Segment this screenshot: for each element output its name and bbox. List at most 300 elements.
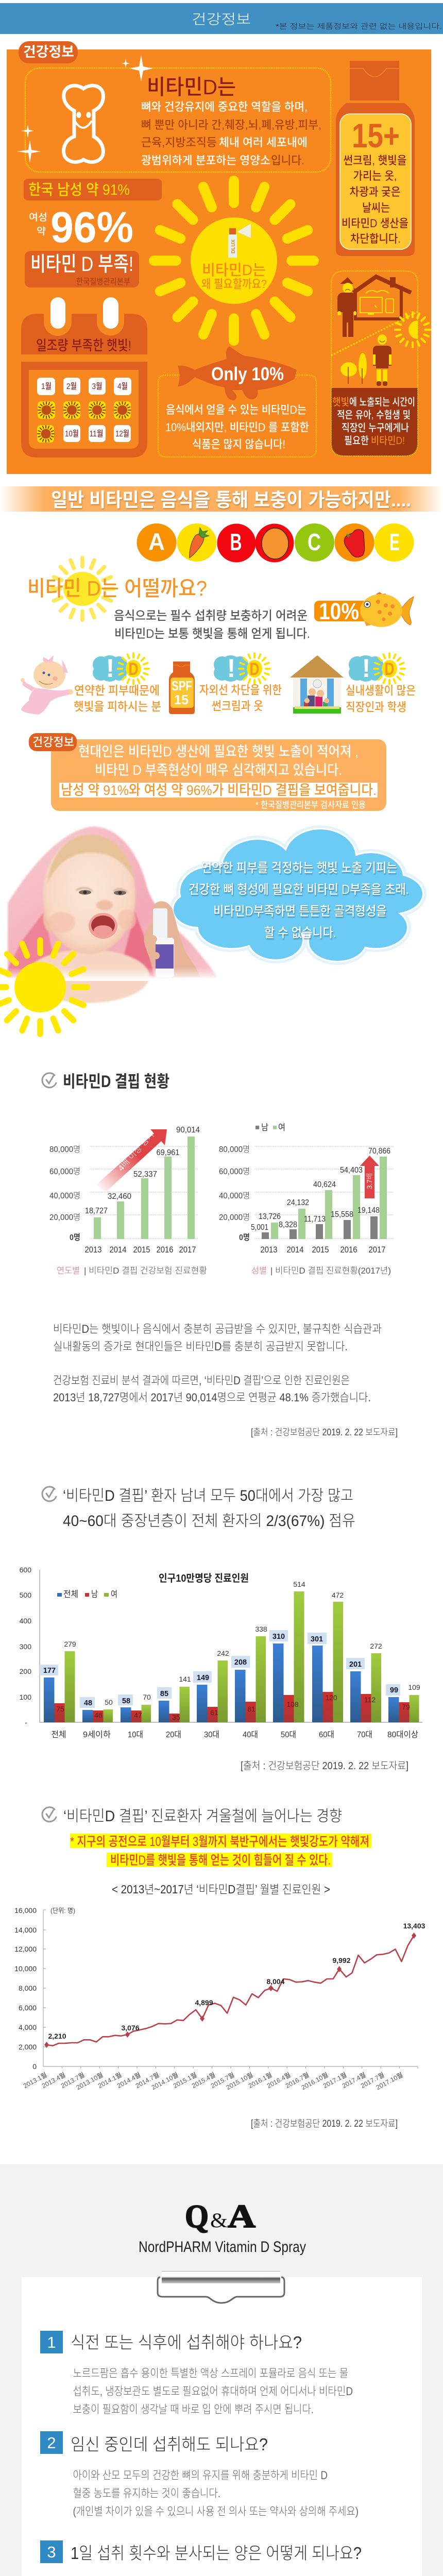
- month cells: 11월: [90, 429, 103, 438]
- question 3: 3: [47, 2543, 56, 2561]
- line chart: monthly patients: [14, 1906, 425, 2091]
- stat: Korean men 91%: 한국 남성 약 91%: [28, 181, 130, 198]
- callout text: 비타민 D 부족현상이 매우 심각해지고 있습니다.: [95, 762, 342, 778]
- big sun: 왜 필요할까요?: [201, 277, 267, 291]
- warning group: sensitive skin baby: [21, 653, 161, 715]
- stat: women 96%: 약: [37, 226, 46, 237]
- callout: vitamin D deficiency: [25, 251, 139, 287]
- icon: warning cloud and sun: [93, 653, 149, 684]
- callout: vitamin D deficiency: 한국질병관리본부: [76, 277, 130, 286]
- bottle text: 날씨는: [362, 201, 390, 214]
- icon: small sun: [395, 312, 430, 347]
- caption: 연약한 피부때문에: [74, 684, 160, 697]
- warning marks: !: [106, 654, 114, 683]
- scene text: 적은 유아, 수험생 및: [337, 409, 411, 421]
- only 10% label: Only 10%: [211, 363, 284, 384]
- source note: * 한국질병관리본부 검사자료 인용: [255, 800, 366, 810]
- total labels: 58: [122, 1697, 130, 1705]
- y axis labels: 40,000명: [219, 1191, 250, 1200]
- question 1: 1: [47, 2333, 56, 2351]
- icon: check: [42, 1807, 56, 1822]
- month labels: 2016.4월: [265, 2071, 292, 2090]
- heading: vitamin D is: 비타민D는: [147, 75, 236, 99]
- value labels: 11,713: [304, 1215, 326, 1224]
- heading: age group: 40~60대 중장년층이 전체 환자의 2/3(67%) 점유: [63, 1513, 355, 1530]
- month labels: 2014.1월: [96, 2071, 123, 2090]
- category labels: [52, 1730, 418, 1739]
- value labels: [251, 1147, 390, 1232]
- month labels: 2014.4월: [115, 2071, 142, 2090]
- category labels: 10대: [128, 1730, 143, 1739]
- year labels: 2014: [109, 1245, 127, 1255]
- vitamin letters: B: [230, 529, 242, 555]
- answer 2: (개인별 차이가 있을 수 있으니 사용 전 의사 또는 약사와 상의해 주세요): [73, 2505, 359, 2518]
- value labels: 15,558: [331, 1210, 353, 1219]
- vitamin letters: E: [389, 529, 400, 555]
- panel: lack of sunlight scene: [331, 271, 430, 456]
- source note: [출처 : 건강보험공단 2019. 2. 22 보도자료]: [241, 1760, 408, 1772]
- calendar heading: 일조량 부족한 햇빛!: [36, 338, 131, 353]
- month labels: 2016.1월: [247, 2071, 273, 2090]
- unit label: (단위: 명): [50, 1907, 75, 1914]
- spray in hand: [144, 901, 201, 977]
- cloud text: [189, 861, 409, 940]
- cloud text: 할 수 없습니다.: [264, 926, 336, 940]
- pill: 10%: 10%: [319, 598, 359, 624]
- male labels: 61: [210, 1708, 218, 1717]
- body text: 비타민D는 보통 햇빛을 통해 얻게 됩니다.: [114, 627, 310, 641]
- total labels: 310: [272, 1633, 285, 1641]
- total labels: 208: [234, 1658, 247, 1667]
- stat: women 96%: 96%: [50, 203, 133, 251]
- body text: 음식으로는 필수 섭취량 보충하기 어려운: [114, 609, 308, 623]
- year labels: 2013: [84, 1245, 102, 1255]
- category labels: 50대: [281, 1730, 296, 1739]
- question 1: 식전 또는 식후에 섭취해야 하나요?: [71, 2333, 302, 2352]
- warning marks: [362, 654, 395, 683]
- year labels: 2015: [312, 1245, 329, 1255]
- female labels: 141: [179, 1675, 191, 1683]
- y labels: 400: [20, 1617, 31, 1625]
- total labels: 177: [43, 1667, 56, 1675]
- female labels: 338: [255, 1625, 267, 1633]
- y axis labels: 60,000명: [49, 1167, 80, 1176]
- month labels: 2013.1월: [22, 2071, 48, 2090]
- answer 1: 보충이 필요함이 생각날 때 바로 입 안에 뿌려 주시면 됩니다.: [73, 2403, 314, 2416]
- warning marks: !: [227, 654, 235, 683]
- total labels: 301: [311, 1635, 323, 1643]
- Q&A title: &: [210, 2209, 228, 2232]
- category labels: 40대: [243, 1730, 258, 1739]
- male labels: [56, 1693, 410, 1721]
- value labels: 54,403: [340, 1166, 363, 1175]
- data labels: 2,210: [48, 2032, 66, 2040]
- scene text: [332, 396, 415, 447]
- bottle text: 비타민D 생산을: [342, 217, 408, 230]
- chart caption: 성별: [251, 1266, 267, 1276]
- description text: 뼈와 건강유지에 중요한 역할을 하며,: [141, 100, 308, 113]
- body text: deficiency explanation: 비타민D는 햇빛이나 음식에서 충분히 공급받을 수 있지만, 불규칙한 식습관과: [53, 1323, 382, 1335]
- total labels: 201: [349, 1660, 362, 1669]
- icon: SPF bottle: [169, 662, 195, 714]
- month labels: 2017.1월: [321, 2071, 348, 2090]
- scene text: 에 노출되는 시간이: [349, 396, 415, 408]
- male labels: 108: [286, 1700, 299, 1708]
- y labels: 10,000: [14, 1964, 37, 1973]
- y axis labels: 20,000명: [219, 1213, 250, 1222]
- answer 2: 혈중 농도를 유지하는 것이 좋습니다.: [73, 2487, 220, 2500]
- month labels: 2015.1월: [172, 2071, 198, 2090]
- caption: [346, 684, 416, 714]
- scene text: 햇빛: [332, 396, 349, 408]
- section: how about vitamin D: [27, 558, 414, 641]
- chart title: 인구10만명당 진료인원: [159, 1572, 249, 1584]
- month labels: 2016.10월: [300, 2071, 329, 2091]
- chart caption: 연도별: [57, 1266, 80, 1276]
- total labels: 85: [160, 1690, 168, 1698]
- body text: deficiency explanation: 2013년 18,727명에서 2017년 90,014명으로 연평균 48.1% 증가했습니다.: [53, 1391, 371, 1404]
- male labels: 81: [247, 1705, 255, 1713]
- year labels: 2014: [286, 1245, 304, 1255]
- stat: women 96%: 여성: [29, 212, 47, 223]
- red bars: [55, 1692, 409, 1722]
- month labels: 2015.4월: [190, 2071, 216, 2090]
- data labels: 8,004: [266, 1977, 285, 1986]
- arrow: 3.7x: 3.7배: [365, 1173, 373, 1189]
- arrow: 4x increase: [96, 1129, 167, 1192]
- year labels: [84, 1245, 196, 1255]
- heading: 비타민 D는 어떨까요?: [27, 577, 207, 600]
- month labels: 2015.7월: [209, 2071, 235, 2090]
- month cells: 10월: [65, 429, 79, 438]
- big sun: [154, 181, 314, 341]
- y labels: 6,000: [19, 2004, 37, 2012]
- y labels: 2,000: [19, 2043, 37, 2051]
- calendar: [21, 297, 147, 457]
- heading: age group: ‘비타민D 결핍’ 환자 남녀 모두 50대에서 가장 많고: [63, 1487, 353, 1504]
- caption: 자외선 차단을 위한: [199, 683, 282, 697]
- year labels: 2013: [261, 1245, 277, 1255]
- y axis labels: 0명: [70, 1233, 80, 1242]
- scene text: 직장인 누구에게나: [342, 422, 409, 434]
- data labels: [48, 1922, 425, 2040]
- icon: sad person indoors: [337, 277, 356, 337]
- Q&A section: [0, 2164, 443, 2576]
- blue bars: [44, 1643, 399, 1722]
- female labels: [64, 1580, 420, 1706]
- y labels: [20, 1566, 31, 1726]
- description text: 광범위하게 분포하는 영양소: [141, 154, 270, 167]
- bottle text: 가리는 옷,: [353, 170, 397, 182]
- panel: orange vitamin D overview: [7, 41, 431, 474]
- male labels: 47: [134, 1711, 142, 1719]
- total labels: 149: [197, 1674, 209, 1682]
- y labels: 100: [20, 1693, 31, 1701]
- female labels: 109: [408, 1683, 420, 1691]
- value labels: 19,148: [357, 1206, 380, 1215]
- icon: orange fruit: [262, 528, 288, 559]
- male labels: 35: [172, 1713, 180, 1721]
- y labels: 200: [20, 1667, 31, 1675]
- callout text: 현대인은 비타민D 생산에 필요한 햇빛 노출이 적어져 ,: [78, 744, 359, 759]
- icon: spray: DLUX: [231, 239, 236, 253]
- body text: deficiency explanation: [53, 1323, 382, 1404]
- icon: check: [42, 1073, 56, 1088]
- bottle text: [342, 154, 408, 245]
- answer 2: [73, 2469, 359, 2518]
- icon: clipboard clip: [158, 2271, 284, 2303]
- question 3: 1일 섭취 횟수와 분사되는 양은 어떻게 되나요?: [71, 2544, 362, 2563]
- heading: winter trend: ‘비타민D 결핍’ 진료환자 겨울철에 늘어나는 경향: [63, 1808, 342, 1825]
- year labels: [261, 1245, 385, 1255]
- month cells: 3월: [92, 382, 102, 391]
- y labels: 8,000: [19, 1984, 37, 1992]
- Q&A title: A: [228, 2198, 255, 2234]
- value labels: 32,460: [108, 1192, 131, 1201]
- month labels: [22, 2071, 404, 2091]
- category labels: 70대: [357, 1730, 372, 1739]
- legend: [255, 1123, 285, 1132]
- answer 1: [73, 2367, 353, 2416]
- warning marks: !: [362, 654, 370, 683]
- header title: 건강정보: [192, 12, 251, 27]
- caption: 썬크림과 옷: [212, 699, 263, 713]
- chart title: < 2013년~2017년 ‘비타민D결핍’ 월별 진료인원 >: [112, 1883, 330, 1896]
- y axis labels: 20,000명: [49, 1213, 80, 1222]
- warning marks: D: [384, 659, 395, 679]
- scene text: 필요한: [344, 435, 369, 447]
- source note: [출처 : 건강보험공단 2019. 2. 22 보도자료]: [251, 1427, 398, 1437]
- y axis labels: 80,000명: [219, 1145, 250, 1154]
- callout text: [78, 744, 359, 778]
- month cells: [37, 378, 131, 443]
- header note: *본 정보는 제품정보와 관련 없는 내용입니다.: [276, 22, 442, 30]
- icon: baby: [21, 655, 73, 715]
- warning marks: D: [249, 659, 260, 679]
- scene text: 비타민D!: [371, 435, 405, 447]
- bar chart: patients per 100k by age: [20, 1566, 422, 1739]
- highlighted statistic: 남성 약 91%와 여성 약 96%가 비타민D 결핍을 보여줍니다.: [61, 783, 377, 798]
- callout: vitamin D deficiency: 비타민 D 부족!: [30, 253, 133, 276]
- markers: [44, 1933, 416, 2048]
- month cells: 2월: [66, 382, 77, 391]
- male labels: 75: [56, 1705, 64, 1713]
- bottle text: 차단합니다.: [350, 232, 401, 245]
- month cells: 12월: [115, 429, 129, 438]
- female labels: 272: [370, 1642, 382, 1650]
- data line: [47, 1936, 414, 2046]
- dotted box: what is vitamin D: [17, 55, 331, 172]
- category labels: 60대: [319, 1730, 334, 1739]
- highlighted note: 비타민D를 햇빛을 통해 얻는 것이 힘들어 질 수 있다.: [110, 1853, 331, 1868]
- category labels: 20대: [166, 1730, 181, 1739]
- vitamin letters: C: [308, 529, 321, 555]
- month cells: 4월: [117, 382, 128, 391]
- icon: check: [42, 1487, 56, 1501]
- male labels: 120: [325, 1693, 337, 1702]
- y labels: [14, 1906, 37, 2071]
- icon: trees: [340, 353, 367, 384]
- callout: modern deficiency: [29, 733, 386, 811]
- female labels: 514: [293, 1580, 305, 1588]
- green bars: [65, 1591, 419, 1722]
- year labels: 2015: [133, 1245, 150, 1255]
- month labels: 2017.10월: [374, 2071, 404, 2091]
- month labels: 2017.4월: [340, 2071, 367, 2090]
- body text: deficiency explanation: 건강보험 진료비 분석 결과에 따르면, ‘비타민D 결핍’으로 인한 진료인원은: [53, 1374, 350, 1387]
- data labels: 4,899: [195, 1998, 213, 2007]
- month cells: 1월: [41, 382, 52, 391]
- Q&A title: Q: [185, 2198, 209, 2234]
- year labels: 2017: [179, 1245, 196, 1255]
- icon: sun behind heading: [52, 558, 113, 620]
- icon: yellow fish: [360, 592, 414, 627]
- legend: 전체: [63, 1589, 78, 1599]
- bars: [262, 1157, 387, 1239]
- food text: 10%내외지만, 비타민D 를 포함한: [165, 421, 309, 434]
- badge: [29, 733, 77, 751]
- legend: 여: [111, 1589, 117, 1599]
- y labels: 14,000: [14, 1926, 37, 1934]
- month labels: 2015.10월: [225, 2071, 254, 2091]
- icon: yellow sun over photo: [0, 940, 87, 1034]
- icon: house: [353, 277, 411, 319]
- value labels: 18,727: [85, 1207, 108, 1215]
- source note: [출처 : 건강보험공단 2019. 2. 22 보도자료]: [251, 2118, 398, 2129]
- data labels: 13,403: [403, 1922, 425, 1930]
- question 1: [40, 2331, 353, 2416]
- value labels: 90,014: [176, 1126, 200, 1134]
- speech cloud: [174, 829, 422, 961]
- year labels: 2017: [369, 1245, 385, 1255]
- badge: health info: 건강정보: [23, 44, 74, 60]
- answer 1: 섭취도, 냉장보관도 별도로 필요없어 휴대하며 언제 어디서나 비타민D: [73, 2385, 353, 2398]
- question 3: [40, 2540, 362, 2576]
- product name: NordPHARM Vitamin D Spray: [139, 2239, 306, 2256]
- arrow: 3.7x: [360, 1156, 379, 1198]
- icon: SPF bottle: 15: [174, 692, 189, 707]
- male labels: 112: [364, 1696, 376, 1704]
- category labels: 전체: [52, 1730, 66, 1739]
- total labels: [40, 1630, 400, 1708]
- y labels: 12,000: [14, 1945, 37, 1953]
- icon: happy person outdoors: [373, 334, 391, 386]
- question 2: 임신 중인데 섭취해도 되나요?: [71, 2435, 268, 2454]
- value labels: 8,328: [279, 1221, 297, 1229]
- year labels: 2016: [340, 1245, 357, 1255]
- gradient banner: 일반 비타민은 음식을 통해 보충이 가능하지만....: [51, 489, 411, 511]
- value labels: [85, 1126, 200, 1215]
- white card: [22, 2277, 422, 2576]
- chart caption: | 비타민D 결핍 진료현황(2017년): [270, 1266, 391, 1276]
- arrow: 4x increase: 4배 이상 증가: [116, 1130, 156, 1173]
- value labels: 40,624: [313, 1180, 336, 1189]
- heading: deficiency status: 비타민D 결핍 현황: [63, 1072, 169, 1091]
- female labels: 50: [105, 1698, 113, 1706]
- y labels: -: [25, 1718, 27, 1726]
- legend: 여: [278, 1123, 285, 1132]
- year labels: 2016: [157, 1245, 173, 1255]
- total labels: 48: [84, 1699, 92, 1707]
- y axis labels: 60,000명: [219, 1167, 250, 1176]
- bar chart: by year: [49, 1126, 207, 1276]
- category labels: 80대이상: [387, 1730, 418, 1739]
- answer 2: 아이와 산모 모두의 건강한 뼈의 유지를 위해 충분하게 비타민 D: [73, 2469, 328, 2482]
- warning group: indoor life: [290, 653, 416, 714]
- header band: [0, 3, 443, 34]
- male labels: 79: [402, 1703, 410, 1711]
- heading: age group: [42, 1487, 355, 1530]
- icon: red pepper: [344, 530, 365, 557]
- axes: [43, 1910, 418, 2069]
- description text: [141, 100, 321, 167]
- month labels: 2014.10월: [150, 2071, 179, 2091]
- y labels: 0: [32, 2062, 37, 2071]
- data labels: 3,076: [121, 2024, 140, 2032]
- vitamin circles row: [137, 523, 414, 563]
- legend: [57, 1589, 117, 1599]
- caption: [74, 684, 161, 713]
- question 2: 2: [47, 2434, 56, 2452]
- value labels: 5,001: [251, 1223, 268, 1232]
- female labels: 70: [143, 1693, 151, 1701]
- SPF value: 15+: [352, 116, 400, 155]
- description text: 입니다.: [271, 154, 304, 167]
- Q&A title: [185, 2198, 255, 2234]
- total labels: 99: [390, 1686, 398, 1694]
- icon: fish: [178, 346, 297, 400]
- body text: deficiency explanation: 실내활동의 증가로 현대인들은 비타민D를 충분히 공급받지 못합니다.: [53, 1340, 348, 1353]
- description text: 뼈 뿐만 아니라 간,췌장,뇌,폐,유방,피부,: [141, 118, 321, 131]
- y axis labels: 80,000명: [49, 1145, 80, 1154]
- food text: [165, 403, 309, 451]
- warning marks: [227, 654, 260, 683]
- warning group: sunscreen: [169, 653, 282, 714]
- caption: 직장인과 학생: [346, 700, 406, 714]
- value labels: 70,866: [368, 1147, 390, 1156]
- legend: 남: [91, 1589, 98, 1599]
- vitamin letters: A: [148, 528, 165, 555]
- y axis labels: 0명: [239, 1233, 250, 1242]
- data labels: 9,992: [332, 1956, 351, 1964]
- question 2: [40, 2431, 359, 2518]
- category labels: 30대: [204, 1730, 219, 1739]
- body text: [114, 609, 310, 641]
- description text: 체내 여러 세포내에: [219, 136, 308, 149]
- y axis labels: 40,000명: [49, 1191, 80, 1200]
- badge: 건강정보: [32, 735, 74, 749]
- warning marks: D: [129, 659, 138, 679]
- category labels: 9세이하: [83, 1730, 111, 1739]
- y labels: 300: [20, 1642, 31, 1651]
- value labels: 52,337: [133, 1170, 157, 1179]
- y axis labels: [49, 1145, 80, 1242]
- female labels: 472: [332, 1591, 344, 1599]
- value labels: 13,726: [259, 1212, 281, 1221]
- y axis labels: [219, 1145, 250, 1242]
- month labels: 2017.7월: [359, 2071, 385, 2090]
- vitamin letters: [148, 528, 400, 555]
- y labels: 4,000: [19, 2023, 37, 2031]
- legend: 남: [261, 1123, 268, 1132]
- month labels: 2016.7월: [284, 2071, 310, 2090]
- month labels: 2014.7월: [134, 2071, 160, 2090]
- food text: 식품은 많지 않습니다!: [192, 438, 285, 451]
- chart caption: | 비타민D 결핍 건강보험 진료현황: [84, 1266, 207, 1276]
- axes: [40, 1570, 422, 1722]
- caption: 햇빛을 피하시는 분: [74, 700, 161, 713]
- bottle text: 썬크림, 햇빛을: [343, 154, 407, 167]
